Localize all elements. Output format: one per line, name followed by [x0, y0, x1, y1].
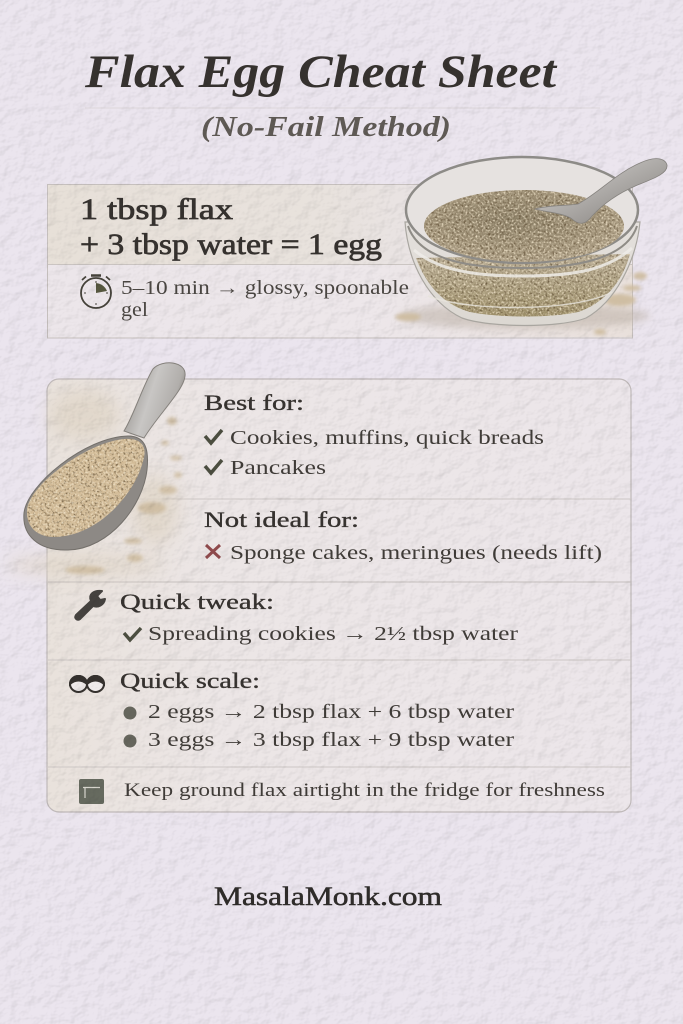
panel: flax egg ratio [48, 184, 632, 338]
section: storage tip: Keep ground flax airtight in the fridge for freshness [124, 780, 605, 801]
icon: container [79, 779, 104, 804]
section: best for [204, 390, 544, 479]
title: Flax Egg Cheat Sheet [84, 46, 558, 98]
bullet [124, 734, 136, 748]
spoon [535, 159, 667, 223]
ratio text [80, 193, 382, 261]
section: quick tweak [75, 589, 518, 645]
section: not ideal for: Sponge cakes, meringues (needs lift) [230, 542, 602, 564]
section: quick tweak: Spreading cookies → 2½ tbsp water [148, 623, 518, 645]
icon: wrench [75, 591, 105, 620]
flax in body [416, 254, 630, 316]
section: storage tip [79, 779, 605, 804]
panel background [48, 184, 632, 338]
gel time text [121, 278, 409, 321]
section: best for: Best for: [204, 390, 304, 415]
glass body [405, 222, 640, 326]
icon: stopwatch [81, 276, 111, 308]
glass rim [406, 157, 638, 263]
bullet [124, 706, 136, 720]
footer: website: MasalaMonk.com [214, 882, 442, 911]
gel time text: 5–10 min → glossy, spoonable [121, 278, 409, 299]
flax surface [424, 190, 624, 262]
card background [47, 379, 631, 812]
icon: check [205, 430, 222, 443]
gel time text: gel [121, 300, 149, 321]
spilled flax [395, 272, 647, 335]
section: quick scale: 3 eggs → 3 tbsp flax + 9 tbsp water [148, 729, 514, 751]
icon: check [205, 460, 222, 473]
section: quick scale: 2 eggs → 2 tbsp flax + 6 tbsp water [148, 701, 514, 723]
section: quick scale [70, 668, 514, 751]
section: best for: Cookies, muffins, quick breads [230, 427, 544, 449]
flax crumbs [65, 417, 182, 574]
panel: uses and tips [5, 379, 631, 812]
subtitle: (No-Fail Method) [201, 112, 451, 143]
flax dust around scoop [5, 389, 179, 575]
section: quick tweak: Quick tweak: [120, 589, 274, 614]
ratio text: + 3 tbsp water = 1 egg [80, 228, 382, 261]
icon: scale rings [70, 676, 104, 692]
section: quick scale: Quick scale: [120, 668, 260, 693]
section: best for: Pancakes [230, 457, 326, 479]
icon: cross [206, 545, 220, 558]
icon: check [124, 628, 141, 640]
icon: measuring scoop with ground flax [24, 363, 185, 550]
section: not ideal for [204, 507, 602, 564]
ratio text: 1 tbsp flax [80, 193, 233, 226]
icon: glass bowl of flax gel with spoon [395, 157, 667, 335]
section: not ideal for: Not ideal for: [204, 507, 359, 532]
